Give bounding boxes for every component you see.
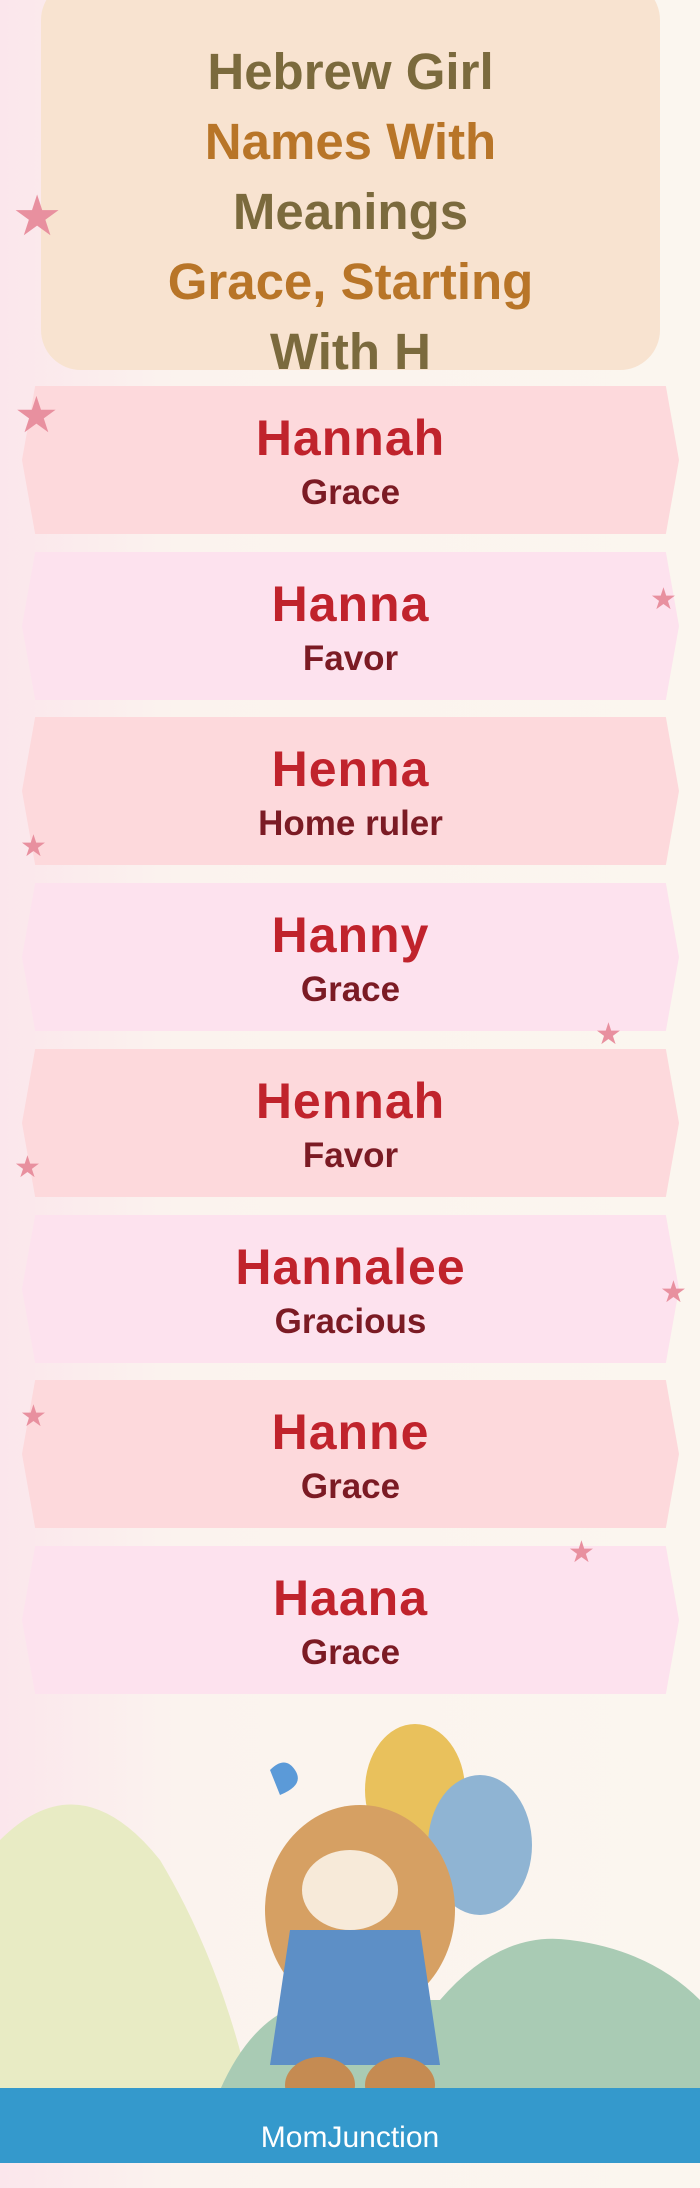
- decorative stars: ★: [14, 1151, 41, 1184]
- illustration: teddy bear with balloons and hills: [0, 1724, 700, 2088]
- title: Meanings: [233, 183, 468, 240]
- card: Henna: [22, 717, 679, 865]
- card: Hennah: Favor: [303, 1136, 398, 1175]
- decorative stars: ★: [20, 1400, 47, 1433]
- title: [168, 43, 533, 380]
- title: Grace, Starting: [168, 253, 533, 310]
- card: Hennah: [22, 1049, 679, 1197]
- decorative stars: ★: [20, 830, 47, 863]
- title: Names With: [205, 113, 496, 170]
- card: Hanne: [22, 1380, 679, 1528]
- card: Henna: Henna: [272, 741, 429, 797]
- decorative stars: ★: [650, 583, 677, 616]
- card: Hannah: Hannah: [256, 410, 445, 466]
- decorative stars: ★: [568, 1536, 595, 1569]
- card: Haana: Haana: [273, 1570, 428, 1626]
- card: Hannalee: [22, 1215, 679, 1363]
- decorative stars: [12, 184, 687, 1569]
- title panel: [41, 0, 660, 370]
- decorative stars: ★: [595, 1018, 622, 1051]
- card: Hanny: Grace: [301, 970, 400, 1009]
- title: With H: [270, 323, 431, 380]
- card: Hanna: Favor: [303, 639, 398, 678]
- card: Haana: [22, 1546, 679, 1694]
- decorative stars: ★: [12, 184, 62, 247]
- decorative stars: ★: [660, 1276, 687, 1309]
- card: Hannah: Grace: [301, 473, 400, 512]
- footer bar with logo: MomJunction: [261, 2121, 439, 2154]
- card: Hannalee: Gracious: [275, 1302, 426, 1341]
- card: Haana: Grace: [301, 1633, 400, 1672]
- card: Hanna: Hanna: [272, 576, 429, 632]
- card: Henna: Home ruler: [258, 804, 443, 843]
- card: Hanne: Hanne: [272, 1404, 429, 1460]
- card: Hanny: [22, 883, 679, 1031]
- card: Hennah: Hennah: [256, 1073, 445, 1129]
- title: Hebrew Girl: [207, 43, 494, 100]
- decorative stars: ★: [14, 387, 59, 443]
- footer bar with logo: [0, 2088, 700, 2163]
- card: Hannah: [22, 386, 679, 534]
- card: Hanny: Hanny: [272, 907, 429, 963]
- card: Hannalee: Hannalee: [235, 1239, 466, 1295]
- card: Hanna: [22, 552, 679, 700]
- card: Hanne: Grace: [301, 1467, 400, 1506]
